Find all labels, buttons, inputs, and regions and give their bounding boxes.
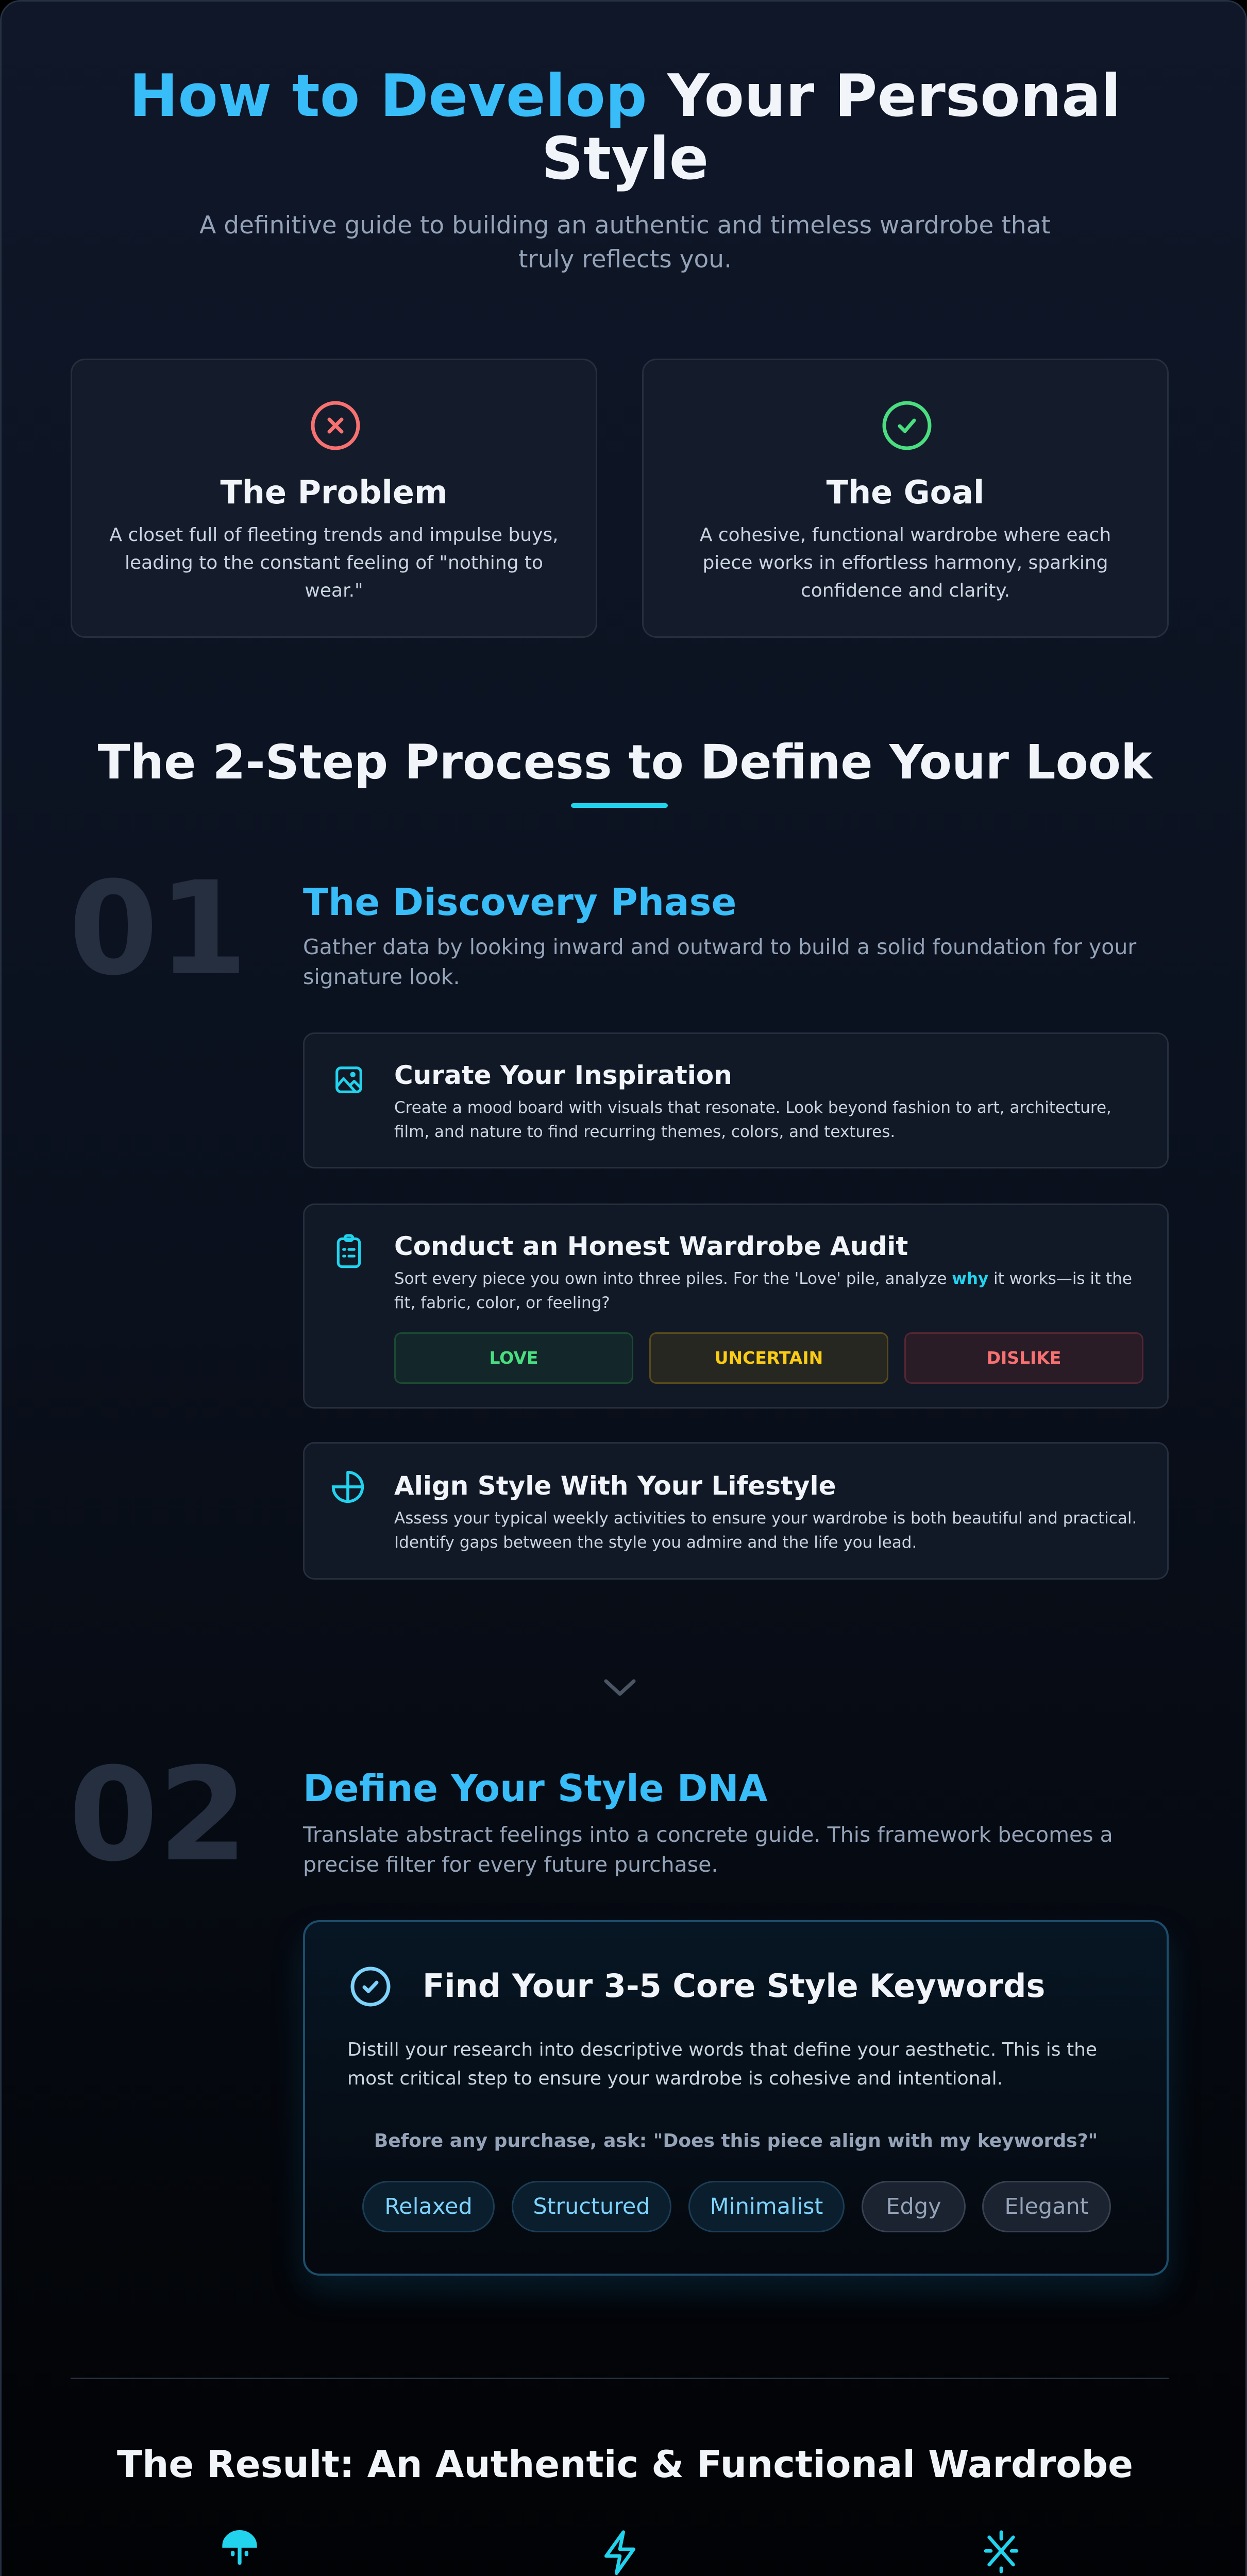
text: A cohesive, functional wardrobe where each piece works in effortless harmony, sparking confidence and clarity. [700, 524, 1111, 601]
heading: The Goal [827, 473, 984, 511]
result heading: The Result: An Authentic & Functional Wardrobe [117, 2443, 1133, 2486]
heading: The Problem [221, 473, 447, 511]
panel: goal [642, 359, 1169, 638]
panel: problem [71, 359, 597, 638]
heading: Find Your 3-5 Core Style Keywords [423, 1967, 1045, 2005]
step desc: Translate abstract feelings into a concrete guide. This framework becomes a precise filter for every future purchase. [303, 1822, 1113, 1877]
icon: check circle [350, 1967, 391, 2006]
step heading: DNA: Define Your Style DNA [303, 1767, 767, 1810]
result: clarity [222, 2530, 257, 2565]
text: Relaxed [384, 2194, 473, 2219]
step desc: Gather data by looking inward and outward to build a solid foundation for your signature look. [303, 935, 1136, 989]
text: Structured [533, 2194, 650, 2219]
icon: lightning [604, 2530, 635, 2575]
text: Minimalist [710, 2194, 823, 2219]
icon: umbrella [222, 2530, 257, 2565]
card: audit [303, 1204, 1169, 1409]
step number 01: 01 [69, 854, 248, 1004]
text: Assess your typical weekly activities to ensure your wardrobe is both beautiful and practical. Identify gaps between the style you admire and the life you lead. [394, 1509, 1137, 1552]
question: Before any purchase, ask: "Does this piece align with my keywords?" [374, 2130, 1098, 2151]
section heading: The 2-Step Process to Define Your Look [98, 735, 1152, 790]
heading: Align Style With Your Lifestyle [394, 1471, 836, 1501]
pill: love [394, 1332, 633, 1384]
card: keywords [303, 1920, 1169, 2276]
pill: dislike: DISLIKE [987, 1348, 1061, 1368]
text: Sort every piece you own into three piles. For the 'Love' pile, analyze why it works—is it the fit, fabric, color, or feeling? [394, 1269, 1132, 1312]
text: Distill your research into descriptive words that define your aesthetic. This is the most critical step to ensure your wardrobe is cohesive and intentional. [347, 2039, 1097, 2089]
icon: pie [332, 1470, 364, 1503]
pill: love: LOVE [489, 1348, 538, 1368]
step heading: discovery: The Discovery Phase [303, 880, 736, 924]
text: A closet full of fleeting trends and impulse buys, leading to the constant feeling of "nothing to wear." [109, 524, 559, 601]
title: Style [542, 125, 709, 193]
pill: uncertain [649, 1332, 888, 1384]
text: Create a mood board with visuals that resonate. Look beyond fashion to art, architecture, film, and nature to find recurring themes, colors, and textures. [394, 1098, 1111, 1141]
icon: image [335, 1066, 362, 1093]
card: curate [303, 1032, 1169, 1168]
icon: sparkles [984, 2530, 1018, 2573]
title [129, 62, 1121, 193]
pill: uncertain: UNCERTAIN [715, 1348, 823, 1368]
arrow: chevron down [604, 1680, 636, 1696]
result: cohesion [604, 2530, 635, 2575]
result: confidence [984, 2530, 1018, 2573]
text: Edgy [886, 2194, 941, 2219]
icon: check circle [882, 401, 932, 450]
keyword chips [362, 2181, 1111, 2232]
title: How to Develop Your Personal [129, 62, 1121, 130]
heading: Conduct an Honest Wardrobe Audit [394, 1231, 908, 1261]
heading: Curate Your Inspiration [394, 1060, 732, 1090]
step number 02: 02 [69, 1740, 248, 1890]
text: Elegant [1004, 2194, 1089, 2219]
subtitle: A definitive guide to building an authentic and timeless wardrobe that truly reflects you. [199, 211, 1051, 274]
pill: dislike [904, 1332, 1143, 1384]
icon: x circle [311, 401, 360, 450]
card: lifestyle [303, 1442, 1169, 1580]
icon: clipboard [337, 1234, 361, 1268]
